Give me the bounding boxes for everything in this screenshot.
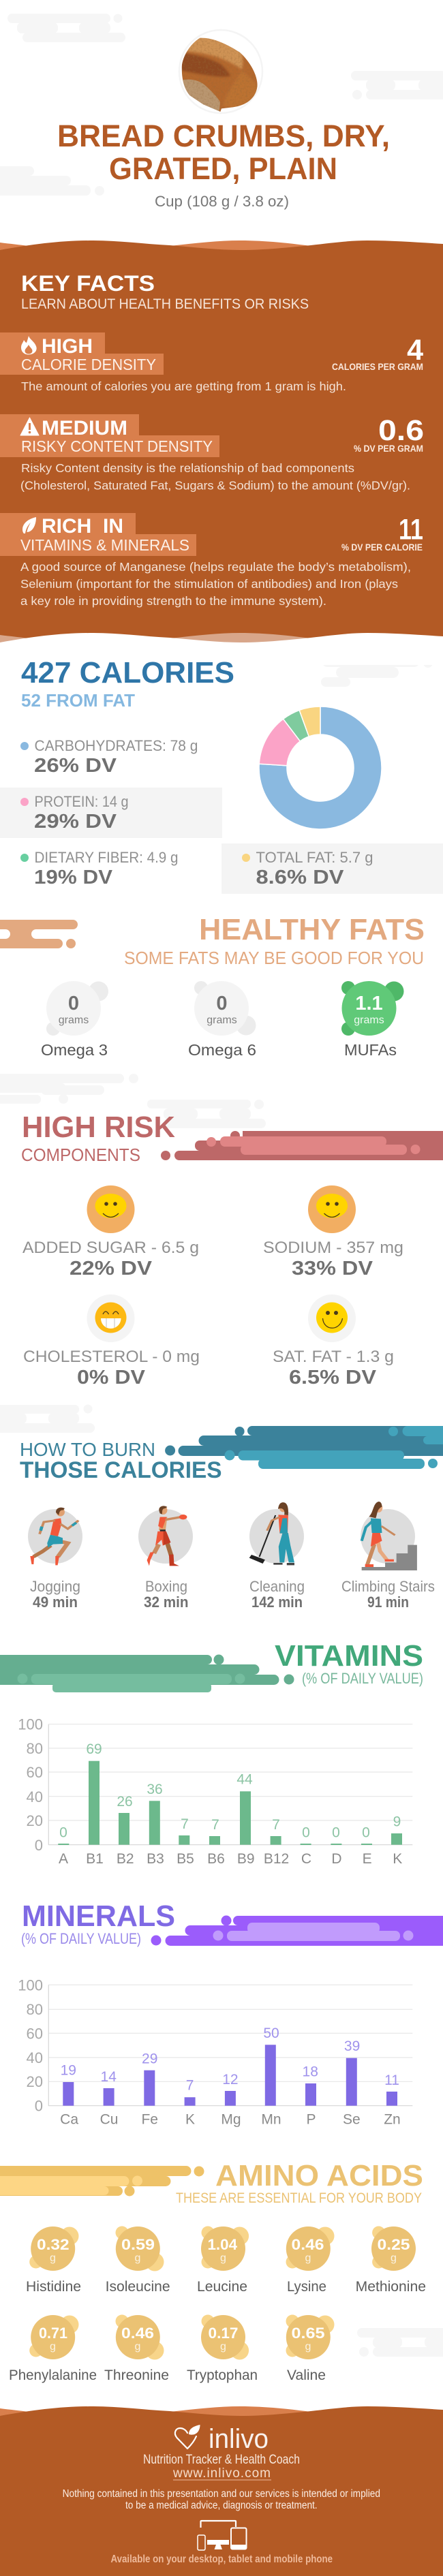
amino: phenylalanine [9, 2315, 97, 2383]
fact: high calorie density: HIGH [42, 335, 93, 358]
bar chart: minerals: 50 [263, 2026, 279, 2041]
activity: cleaning [249, 1502, 305, 1611]
component: cholesterol [23, 1294, 200, 1388]
disclaimer: Nothing contained in this presentation and our services is intended or implied [63, 2488, 380, 2500]
component: sodium: 33% DV [292, 1258, 373, 1279]
key facts heading: KEY FACTS [21, 271, 155, 296]
fact: high calorie density [0, 332, 423, 393]
bar chart: vitamins: 7 [181, 1816, 189, 1832]
bar chart: vitamins: B5 [177, 1851, 194, 1867]
amino: lysine: g [305, 2252, 311, 2264]
footer [0, 2406, 443, 2576]
title: BREAD CRUMBS, DRY, [57, 119, 390, 153]
icon: warning triangle [20, 418, 39, 435]
bar chart: minerals: 11 [384, 2073, 399, 2088]
high risk heading [21, 1111, 175, 1165]
bar chart: minerals: 20 [27, 2073, 43, 2090]
activity: jogging: 49 min [33, 1594, 78, 1611]
amino: lysine: Lysine [287, 2279, 326, 2295]
component: saturated fat: 6.5% DV [289, 1367, 377, 1388]
fact: rich in vitamins and minerals: A good source of Manganese (helps regulate the body’s metabolism), [20, 560, 411, 574]
vitamins heading: VITAMINS [275, 1639, 423, 1673]
legend: protein: PROTEIN: 14 g [34, 793, 128, 810]
bar chart: vitamins: 60 [27, 1764, 43, 1781]
healthy fats heading [124, 913, 425, 968]
fat: omega 6: Omega 6 [188, 1041, 256, 1059]
amino: valine [286, 2315, 334, 2383]
amino: methionine: 0.25 [378, 2236, 410, 2253]
amino: valine: g [305, 2341, 311, 2353]
minerals heading: (% OF DAILY VALUE) [21, 1930, 141, 1947]
bar chart: vitamins: 7 [211, 1817, 219, 1833]
bar chart: vitamins: 0 [332, 1825, 340, 1841]
bar chart: vitamins: 44 [236, 1772, 253, 1788]
amino: isoleucine [106, 2226, 170, 2295]
amino: methionine: Methionine [356, 2279, 426, 2295]
fact: medium risky content density: Risky Content density is the relationship of bad components [21, 461, 354, 475]
panel: calories [0, 656, 443, 894]
availability note: Available on your desktop, tablet and mobile phone [110, 2554, 333, 2565]
bar chart: minerals: Mn [261, 2111, 281, 2127]
legend: protein: 29% DV [34, 811, 117, 833]
bar chart: vitamins: 0 [59, 1825, 67, 1841]
bar chart: minerals: Mg [221, 2111, 241, 2127]
bar chart: vitamins: A [59, 1851, 68, 1867]
burn heading: THOSE CALORIES [20, 1457, 222, 1483]
legend: dietary fiber [20, 849, 179, 888]
amino: threonine: g [135, 2341, 140, 2353]
panel: healthy fats [0, 913, 425, 1059]
amino: methionine: g [391, 2252, 397, 2264]
amino: leucine: Leucine [197, 2279, 247, 2295]
minerals heading [21, 1899, 175, 1947]
fat: omega 3: Omega 3 [41, 1041, 108, 1059]
legend: carbohydrates: 26% DV [34, 755, 117, 777]
amino: phenylalanine: g [50, 2341, 56, 2353]
healthy fats heading: HEALTHY FATS [199, 913, 425, 946]
bar chart: minerals: 29 [142, 2051, 157, 2067]
fact: rich in vitamins and minerals: a key role in providing strength to the immune system). [20, 594, 326, 608]
bar chart: minerals: 100 [18, 1977, 43, 1994]
bar chart: vitamins: 100 [18, 1716, 43, 1733]
healthy fats heading: SOME FATS MAY BE GOOD FOR YOU [124, 948, 424, 968]
bar chart: minerals: Ca [60, 2111, 78, 2127]
amino: phenylalanine: Phenylalanine [9, 2368, 97, 2383]
fact: medium risky content density: 0.6 [378, 414, 424, 447]
activity: jogging [28, 1508, 82, 1611]
amino: threonine [104, 2315, 169, 2383]
activity: boxing: Boxing [145, 1578, 187, 1595]
component: saturated fat: SAT. FAT - 1.3 g [273, 1348, 394, 1366]
amino: isoleucine: Isoleucine [106, 2279, 170, 2295]
bar chart: minerals: Zn [384, 2111, 401, 2127]
key facts heading [21, 271, 309, 312]
legend: dietary fiber: DIETARY FIBER: 4.9 g [34, 849, 179, 866]
legend: protein [20, 793, 128, 833]
legend: total fat: TOTAL FAT: 5.7 g [256, 849, 373, 866]
amino: leucine: g [220, 2252, 226, 2264]
fact: rich in vitamins and minerals: % DV PER CALORIE [341, 542, 423, 553]
header [57, 30, 390, 210]
donut chart [259, 707, 382, 829]
fact: rich in vitamins and minerals: RICH IN [42, 515, 123, 538]
bar chart: vitamins: B12 [264, 1851, 289, 1867]
panel: vitamins [0, 1639, 423, 1867]
amino: valine: 0.65 [292, 2325, 324, 2342]
component: sodium: SODIUM - 357 mg [263, 1239, 403, 1257]
activity: boxing [138, 1506, 193, 1611]
fact: medium risky content density [0, 414, 424, 492]
fat: mufas: MUFAs [344, 1041, 397, 1059]
amino acids heading: AMINO ACIDS [215, 2159, 423, 2192]
icon: flame [21, 336, 37, 354]
bar chart: vitamins: 40 [27, 1788, 43, 1805]
bar chart: minerals: 40 [27, 2049, 43, 2066]
bar chart: minerals: Se [343, 2111, 361, 2127]
activity: cleaning: Cleaning [249, 1578, 305, 1595]
fact: high calorie density: 4 [407, 334, 423, 367]
calories heading [21, 656, 234, 711]
fact: medium risky content density: RISKY CONTENT DENSITY [21, 437, 213, 455]
bar chart: vitamins: B6 [207, 1851, 225, 1867]
fact: high calorie density: The amount of calories you are getting from 1 gram is high. [21, 379, 346, 393]
calories heading: 427 CALORIES [21, 656, 234, 689]
panel: how to burn calories [20, 1426, 443, 1611]
legend: carbohydrates [20, 737, 198, 777]
banner shape: high risk [161, 1131, 443, 1160]
bar chart: minerals: 14 [101, 2069, 117, 2085]
bar chart: minerals: 0 [35, 2098, 43, 2115]
bar chart: vitamins: E [363, 1851, 372, 1867]
bar chart: minerals: 19 [61, 2063, 76, 2079]
bar chart: vitamins: C [301, 1851, 311, 1867]
component: cholesterol: CHOLESTEROL - 0 mg [23, 1348, 200, 1366]
amino: histidine: Histidine [26, 2279, 81, 2295]
component: sodium [263, 1185, 403, 1279]
component: added sugar: 22% DV [70, 1258, 153, 1279]
amino: threonine: Threonine [104, 2368, 169, 2383]
amino: threonine: 0.46 [121, 2325, 154, 2342]
legend: total fat [242, 849, 373, 888]
component: cholesterol: 0% DV [77, 1367, 146, 1388]
amino: leucine [197, 2226, 249, 2295]
amino: tryptophan: Tryptophan [187, 2368, 258, 2383]
component: added sugar: ADDED SUGAR - 6.5 g [22, 1239, 199, 1257]
bar chart: vitamins: 80 [27, 1740, 43, 1757]
banner shape: amino acids [0, 2166, 204, 2197]
amino: lysine: 0.46 [292, 2236, 324, 2253]
bar chart: minerals: 80 [27, 2001, 43, 2018]
banner shape: healthy fats [0, 920, 78, 948]
minerals heading: MINERALS [22, 1899, 175, 1933]
bar chart: vitamins: B1 [86, 1851, 104, 1867]
amino: lysine [286, 2226, 334, 2295]
bar chart: minerals: 60 [27, 2026, 43, 2043]
activity: boxing: 32 min [144, 1594, 188, 1611]
legend: dietary fiber: 19% DV [34, 867, 113, 888]
panel: high risk components [21, 1111, 443, 1388]
fact: high calorie density: CALORIES PER GRAM [332, 361, 423, 372]
amino: tryptophan: 0.17 [209, 2325, 239, 2342]
bar chart: vitamins: 9 [393, 1814, 401, 1830]
legend: carbohydrates: CARBOHYDRATES: 78 g [34, 737, 198, 754]
high risk heading: HIGH RISK [22, 1111, 175, 1144]
bar chart: vitamins: 0 [35, 1837, 43, 1854]
bar chart: minerals: K [185, 2111, 195, 2127]
bar chart: vitamins: B9 [237, 1851, 255, 1867]
disclaimer: to be a medical advice, diagnosis or treatment. [125, 2500, 318, 2511]
bar chart: vitamins: D [331, 1851, 342, 1867]
fact: rich in vitamins and minerals: VITAMINS & MINERALS [20, 536, 189, 554]
bar chart: minerals: 12 [222, 2072, 239, 2088]
bar chart: minerals: P [306, 2111, 316, 2127]
fat: mufas: grams [354, 1014, 384, 1026]
amino: isoleucine: 0.59 [121, 2236, 155, 2253]
website link: www.inlivo.com [172, 2466, 271, 2481]
amino: phenylalanine: 0.71 [39, 2325, 67, 2342]
bar chart: vitamins: B3 [147, 1851, 164, 1867]
bar chart: vitamins: B2 [117, 1851, 134, 1867]
fact: medium risky content density: MEDIUM [42, 417, 127, 439]
bar chart: minerals [18, 1977, 412, 2127]
fact: medium risky content density: (Cholesterol, Saturated Fat, Sugars & Sodium) to the amount (%DV/gr). [20, 478, 410, 492]
banner shape: minerals [151, 1916, 443, 1946]
fat: mufas [341, 981, 403, 1059]
key facts heading: LEARN ABOUT HEALTH BENEFITS OR RISKS [21, 296, 309, 312]
fat: omega 6: grams [207, 1014, 237, 1026]
fact: high calorie density: CALORIE DENSITY [21, 356, 156, 373]
vitamins heading [275, 1639, 423, 1687]
panel: amino acids [0, 2159, 426, 2383]
bar chart: vitamins: K [393, 1851, 402, 1867]
component: added sugar [22, 1185, 199, 1279]
fact: medium risky content density: % DV PER GRAM [354, 443, 423, 454]
fat: omega 3: grams [59, 1014, 89, 1026]
fat: omega 6 [188, 981, 256, 1059]
activity: climbing stairs: 91 min [367, 1594, 409, 1611]
burn heading: HOW TO BURN [20, 1439, 155, 1460]
icon: leaf [22, 517, 36, 533]
bar chart: minerals: Fe [141, 2111, 158, 2127]
amino: valine: Valine [287, 2368, 326, 2383]
fat: omega 3 [41, 981, 108, 1059]
component: saturated fat [273, 1294, 394, 1388]
banner shape: vitamins [0, 1654, 294, 1692]
banner shape: burn [165, 1426, 443, 1469]
fat: omega 3: 0 [68, 993, 79, 1014]
fat: mufas: 1.1 [355, 993, 383, 1014]
logo: inlivo heart: inlivo [209, 2424, 269, 2454]
amino acids heading [176, 2159, 423, 2206]
high risk heading: COMPONENTS [21, 1145, 140, 1165]
activity: climbing stairs [341, 1502, 435, 1611]
bar chart: vitamins: 69 [86, 1741, 102, 1757]
title: GRATED, PLAIN [109, 151, 337, 186]
panel: key facts [0, 240, 443, 665]
title [57, 119, 390, 186]
amino: isoleucine: g [135, 2252, 140, 2264]
amino: tryptophan [187, 2315, 258, 2383]
bar chart: minerals: Cu [100, 2111, 118, 2127]
bar chart: vitamins: 7 [272, 1817, 280, 1833]
fat: omega 6: 0 [216, 993, 228, 1014]
bar chart: minerals: 7 [186, 2078, 194, 2094]
food image: bread loaf [179, 30, 262, 114]
icon: devices [198, 2521, 247, 2550]
legend: total fat: 8.6% DV [256, 867, 344, 888]
bar chart: vitamins: 20 [27, 1812, 43, 1829]
bar chart: vitamins: 0 [362, 1825, 370, 1841]
activity: cleaning: 142 min [251, 1594, 303, 1611]
logo: inlivo heart [175, 2424, 269, 2454]
fact: rich in vitamins and minerals: Selenium (important for the stimulation of antibodies) and Iron (plays [20, 577, 398, 591]
activity: jogging: Jogging [30, 1578, 80, 1595]
amino: methionine [356, 2226, 426, 2295]
amino: leucine: 1.04 [207, 2236, 238, 2253]
burn heading [20, 1439, 222, 1483]
activity: climbing stairs: Climbing Stairs [341, 1578, 435, 1595]
amino: histidine [26, 2226, 81, 2295]
fact: rich in vitamins and minerals: 11 [399, 514, 423, 546]
amino: histidine: 0.32 [37, 2236, 70, 2253]
bar chart: vitamins [18, 1716, 412, 1867]
amino: histidine: g [50, 2252, 56, 2264]
bar chart: minerals: 39 [344, 2038, 360, 2054]
bar chart: vitamins: 26 [117, 1794, 133, 1810]
amino: tryptophan: g [220, 2341, 226, 2353]
disclaimer [63, 2488, 380, 2511]
bar chart: minerals: 18 [303, 2064, 318, 2080]
bar chart: vitamins: 36 [147, 1782, 163, 1797]
calories heading: 52 FROM FAT [21, 690, 135, 711]
panel: minerals [18, 1899, 443, 2127]
fact: rich in vitamins and minerals [0, 513, 423, 608]
tagline: Nutrition Tracker & Health Coach [143, 2452, 300, 2467]
serving size: Cup (108 g / 3.8 oz) [155, 193, 289, 210]
bar chart: vitamins: 0 [302, 1825, 310, 1841]
